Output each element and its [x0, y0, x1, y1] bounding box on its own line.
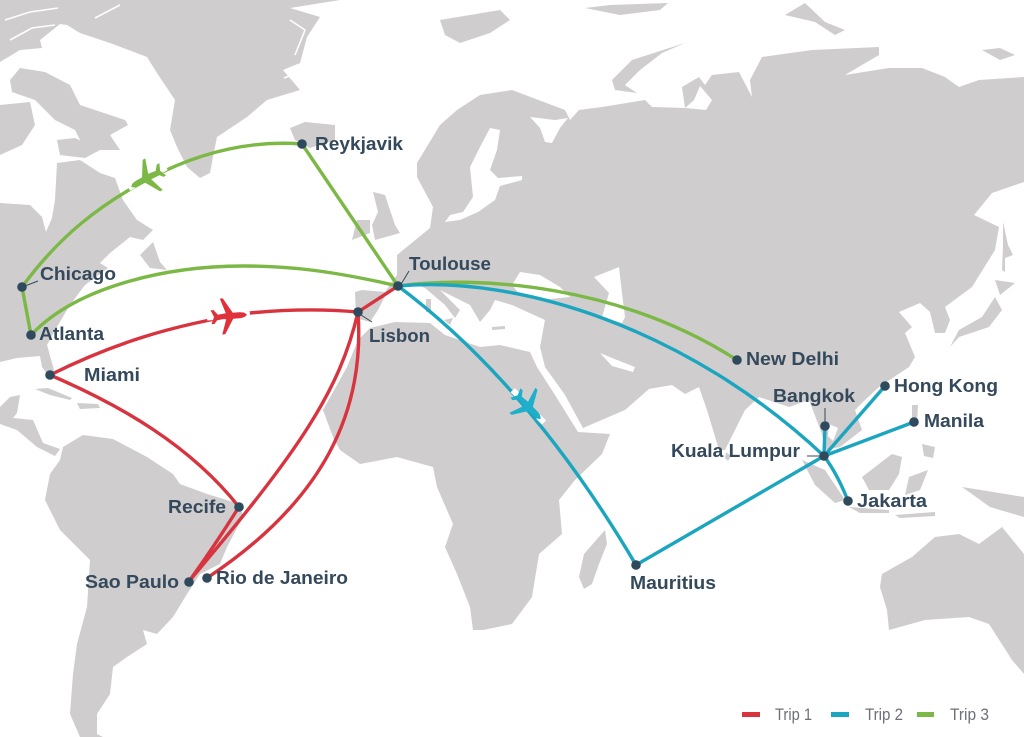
legend item: Trip 3	[917, 705, 989, 724]
city labels: Reykjavik	[315, 134, 404, 154]
city labels: New Delhi	[746, 349, 839, 369]
land: Africa	[323, 322, 610, 630]
land: Southeast Asian islands	[725, 405, 1024, 518]
land: United Kingdom and Ireland	[352, 192, 400, 240]
route network: Trip 2	[398, 285, 914, 565]
city labels: Recife	[168, 497, 226, 517]
land: Arctic islands	[440, 3, 1015, 93]
city labels: Atlanta	[39, 324, 105, 344]
legend item: Trip 3: Trip 3	[950, 705, 989, 724]
land: Australia	[880, 527, 1024, 674]
legend	[742, 705, 989, 724]
city markers	[17, 139, 919, 587]
land: Greenland and Arctic Canada	[0, 0, 340, 178]
city labels: Chicago	[40, 264, 116, 284]
city labels: Hong Kong	[894, 376, 998, 396]
seas: Baltic, White Sea, Black Sea, Caspian, Persian Gulf	[445, 86, 838, 441]
city labels: Mauritius	[630, 573, 716, 593]
land: Madagascar	[579, 530, 607, 589]
route network: Trip 3	[22, 143, 737, 360]
city labels: Sao Paulo	[85, 572, 179, 592]
city labels: Rio de Janeiro	[216, 568, 348, 588]
legend item: Trip 2: Trip 2	[865, 705, 903, 724]
leader lines for labels	[25, 271, 825, 456]
land: Iceland	[290, 122, 335, 148]
legend item: Trip 1	[742, 705, 812, 724]
city labels: Manila	[924, 411, 985, 431]
city labels: Kuala Lumpur	[671, 441, 800, 461]
land: Eurasia	[355, 47, 1024, 450]
city labels: Miami	[84, 365, 140, 385]
legend item: Trip 2	[831, 705, 903, 724]
land: Caribbean islands	[35, 388, 100, 409]
icon: blue plane	[500, 378, 557, 435]
land: North America	[0, 160, 153, 378]
land: Newfoundland	[140, 242, 167, 270]
icon: red plane	[206, 297, 251, 335]
icon: green plane	[120, 152, 175, 204]
legend item: Trip 1: Trip 1	[775, 705, 812, 724]
city labels	[39, 134, 998, 593]
route network: Trip 1	[50, 286, 398, 580]
city labels: Bangkok	[773, 386, 856, 406]
land: Mediterranean islands	[426, 299, 505, 330]
land: Central America	[0, 395, 60, 456]
city labels: Lisbon	[369, 326, 430, 346]
land: South America	[45, 435, 243, 737]
city labels: Toulouse	[409, 254, 491, 274]
land: Japan and Sakhalin	[950, 222, 1015, 347]
city labels: Jakarta	[857, 491, 928, 511]
